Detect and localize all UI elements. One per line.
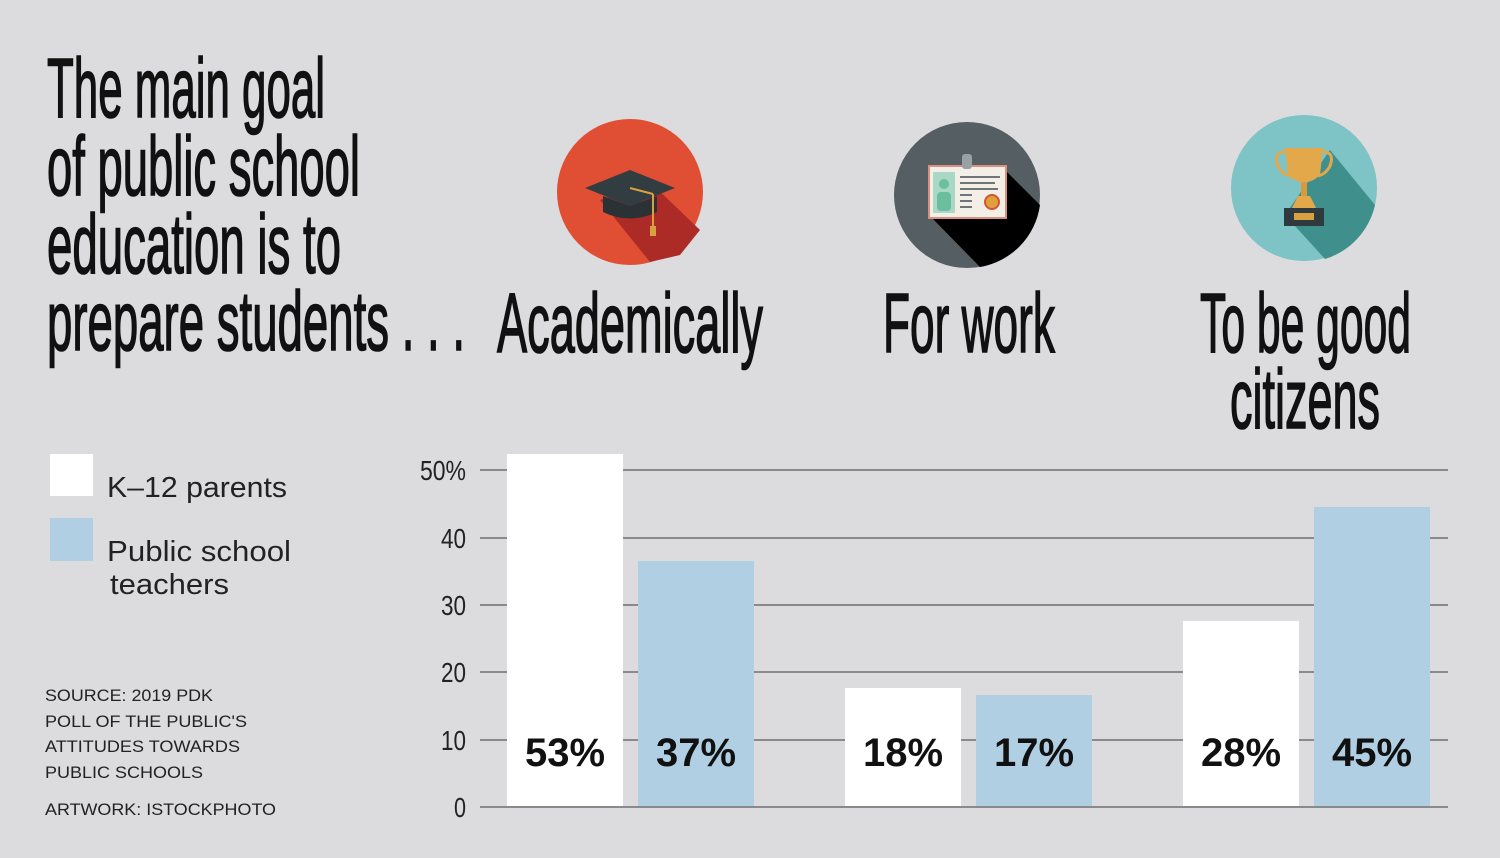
y-axis labels: 30 — [441, 590, 466, 621]
bar value labels: 18% — [863, 731, 943, 775]
icon: id badge — [894, 122, 1040, 268]
title: prepare students . . . — [47, 274, 465, 368]
source note — [45, 686, 276, 819]
source note: SOURCE: 2019 PDK — [45, 686, 214, 705]
bar value labels: 28% — [1201, 731, 1281, 775]
title — [47, 41, 465, 368]
category label: academically: Academically — [497, 276, 763, 370]
source note: PUBLIC SCHOOLS — [45, 763, 203, 782]
source note: ARTWORK: ISTOCKPHOTO — [45, 800, 276, 819]
category label: good citizens — [1200, 276, 1411, 446]
category label: for work: For work — [883, 276, 1056, 370]
legend: K–12 parents — [107, 472, 287, 504]
source note: ATTITUDES TOWARDS — [45, 737, 240, 756]
icon: trophy — [1231, 115, 1377, 261]
legend — [50, 454, 291, 601]
bar chart — [420, 454, 1448, 823]
source note: POLL OF THE PUBLIC'S — [45, 712, 247, 731]
bar value labels: 45% — [1332, 731, 1412, 775]
bar value labels: 17% — [994, 731, 1074, 775]
bar value labels: 53% — [525, 731, 605, 775]
title: The main goal — [47, 41, 325, 135]
bar value labels — [525, 731, 1412, 775]
icon: graduation cap — [557, 119, 703, 265]
legend: Public school — [107, 536, 291, 568]
y-axis labels: 0 — [454, 792, 466, 823]
legend: teachers — [110, 569, 229, 601]
y-axis labels: 40 — [441, 523, 466, 554]
title: education is to — [47, 197, 341, 291]
y-axis labels: 20 — [441, 657, 466, 688]
y-axis labels — [420, 455, 466, 823]
y-axis labels: 50% — [420, 455, 466, 486]
title: of public school — [47, 119, 360, 213]
bar value labels: 37% — [656, 731, 736, 775]
y-axis labels: 10 — [441, 725, 466, 756]
